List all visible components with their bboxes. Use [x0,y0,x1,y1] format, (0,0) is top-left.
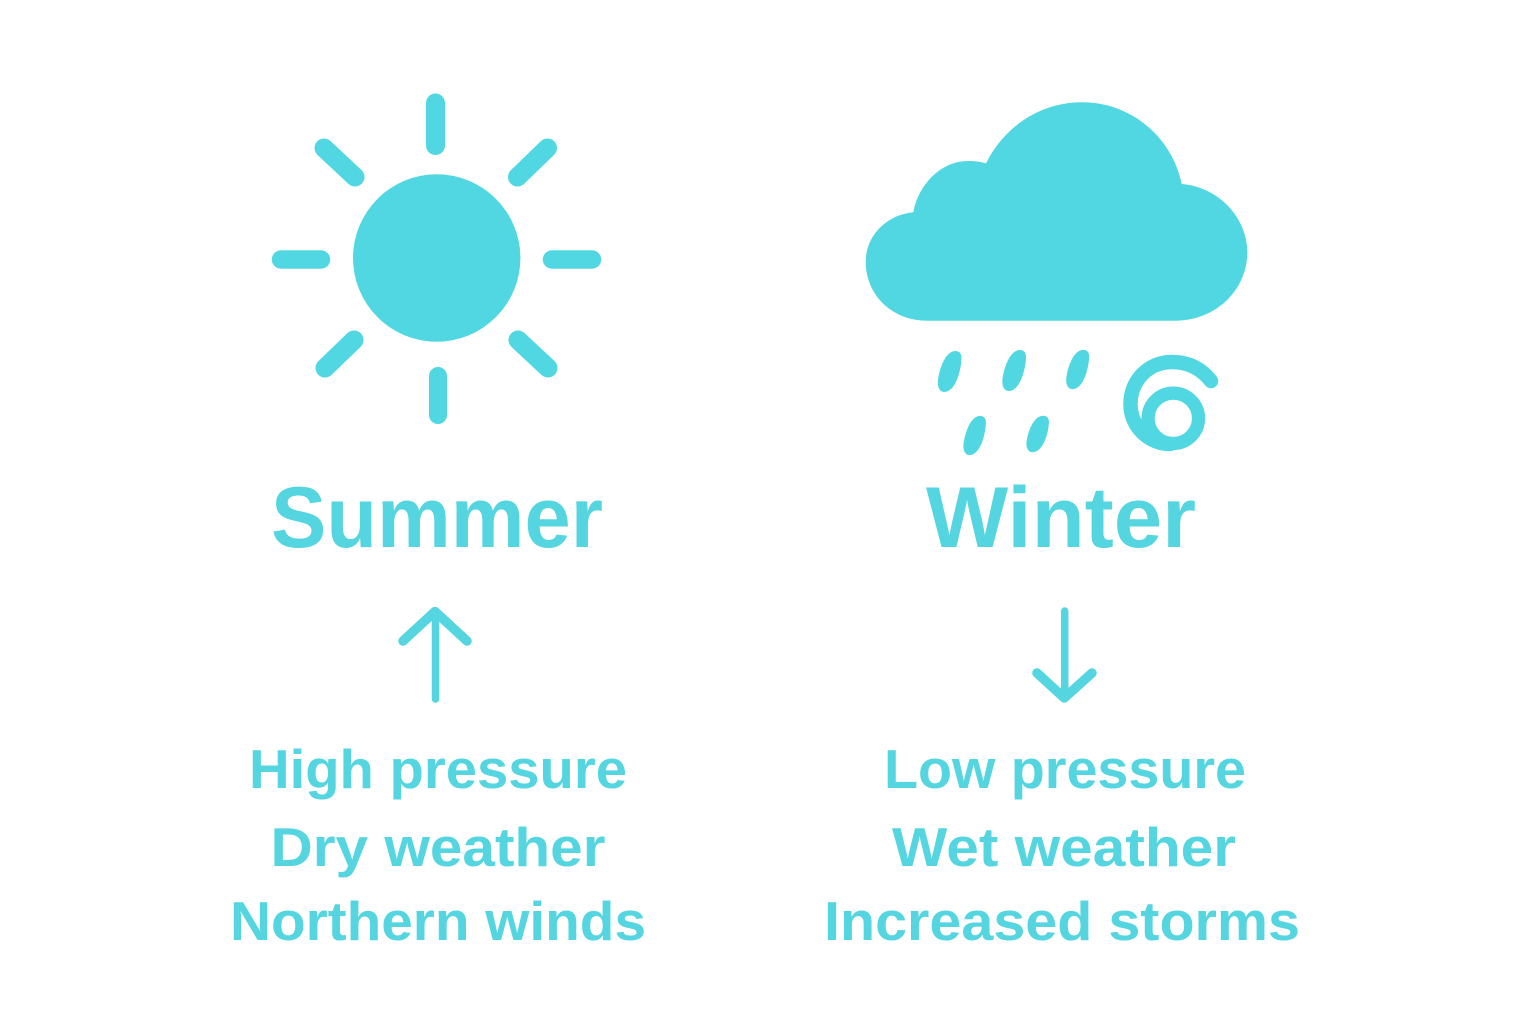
text block: summer conditions: Northern winds [230,890,646,952]
arrow: up [403,612,467,699]
text block: summer conditions: High pressure [249,738,627,800]
icon: rain drops [938,350,1089,455]
icon: sun [281,103,592,415]
text block: winter conditions [824,738,1300,952]
panel: winter [824,102,1300,952]
icon: storm spiral [1130,362,1211,444]
heading: Summer: Summer [271,470,603,566]
text block: summer conditions: Dry weather [270,816,606,878]
text block: winter conditions: Increased storms [824,890,1300,952]
text block: summer conditions [230,738,646,952]
arrow: down [1037,611,1092,698]
text block: winter conditions: Low pressure [884,738,1246,800]
text block: winter conditions: Wet weather [892,816,1236,878]
icon: cloud [866,102,1247,321]
heading: Winter: Winter [926,470,1196,566]
panel: summer [230,103,646,952]
